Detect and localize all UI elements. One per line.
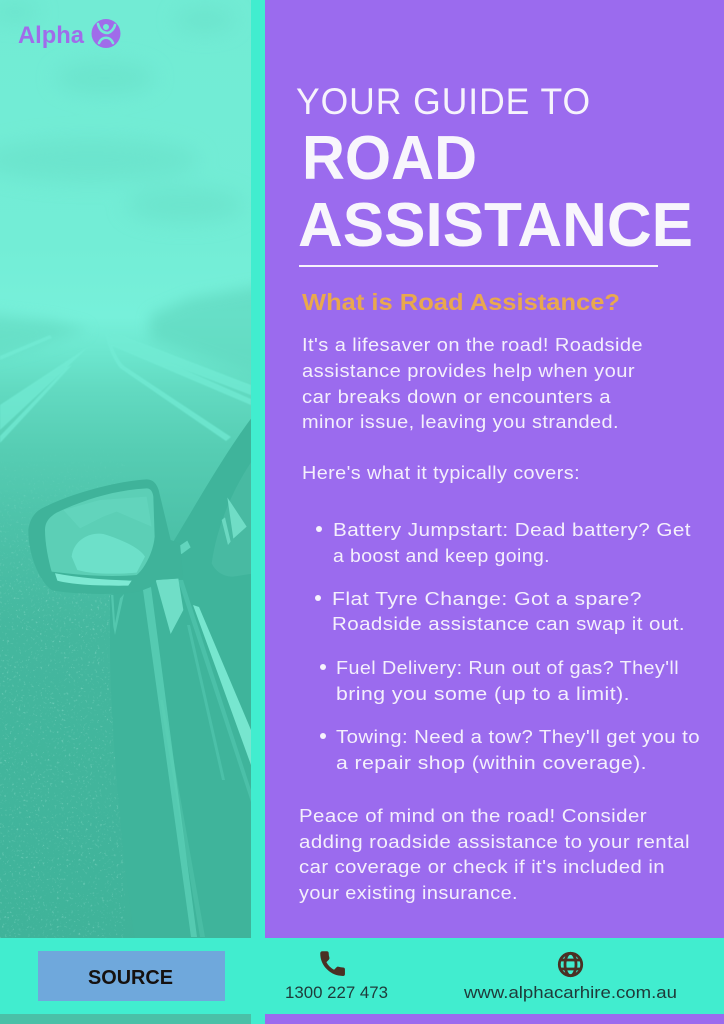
phone number: 1300 227 473 (285, 983, 388, 1002)
text block: intro: car breaks down or encounters a (302, 386, 611, 407)
website: www.alphacarhire.com.au (463, 983, 677, 1002)
asphalt speckle (0, 440, 125, 938)
title: ASSISTANCE (298, 191, 693, 260)
text block: peace of mind (299, 805, 690, 903)
car body (110, 419, 251, 844)
photo panel: road and car mirror (0, 0, 270, 1024)
list item: towing: Towing: Need a tow? They'll get you to (336, 726, 700, 747)
list item: flat tyre change (315, 588, 685, 634)
logo: Alpha (18, 22, 85, 49)
heading: what is road assistance: What is Road Assistance? (302, 289, 620, 315)
title: ROAD (302, 124, 477, 193)
text block: intro: It's a lifesaver on the road! Roadside (302, 334, 643, 355)
list item: towing: a repair shop (within coverage). (336, 752, 647, 773)
icon: globe (559, 953, 582, 976)
list item: battery jumpstart: a boost and keep going. (333, 545, 550, 566)
list item: fuel delivery: bring you some (up to a limit). (336, 683, 630, 704)
source button: SOURCE (88, 967, 173, 989)
text block: peace of mind: adding roadside assistance to your rental (299, 831, 690, 852)
title (296, 81, 693, 260)
car mirror (28, 479, 183, 594)
list item: battery jumpstart (316, 519, 691, 566)
footer band (0, 938, 724, 1014)
logo (18, 19, 120, 49)
text block: peace of mind: Peace of mind on the road! Consider (299, 805, 647, 826)
list item: flat tyre change: Roadside assistance can swap it out. (332, 613, 685, 634)
distant hills (150, 286, 251, 362)
list item: fuel delivery (320, 657, 679, 704)
list item: flat tyre change: Flat Tyre Change: Got a spare? (332, 588, 642, 609)
list item: fuel delivery: Fuel Delivery: Run out of gas? They'll (336, 657, 679, 678)
title: YOUR GUIDE TO (296, 81, 591, 122)
list item: battery jumpstart: Battery Jumpstart: Dead battery? Get (333, 519, 691, 540)
source button (38, 951, 225, 1001)
text block: intro: assistance provides help when your (302, 360, 635, 381)
door reflections (143, 580, 251, 937)
text block: intro (302, 334, 643, 432)
text block: peace of mind: your existing insurance. (299, 882, 518, 903)
road markings (0, 342, 251, 442)
teal vertical strip (251, 0, 265, 1024)
text block: intro: minor issue, leaving you stranded. (302, 411, 619, 432)
text block: peace of mind: car coverage or check if it's included in (299, 856, 665, 877)
text block: covers intro: Here's what it typically covers: (302, 462, 580, 483)
list item: towing (320, 726, 700, 773)
icon: phone (321, 952, 344, 975)
